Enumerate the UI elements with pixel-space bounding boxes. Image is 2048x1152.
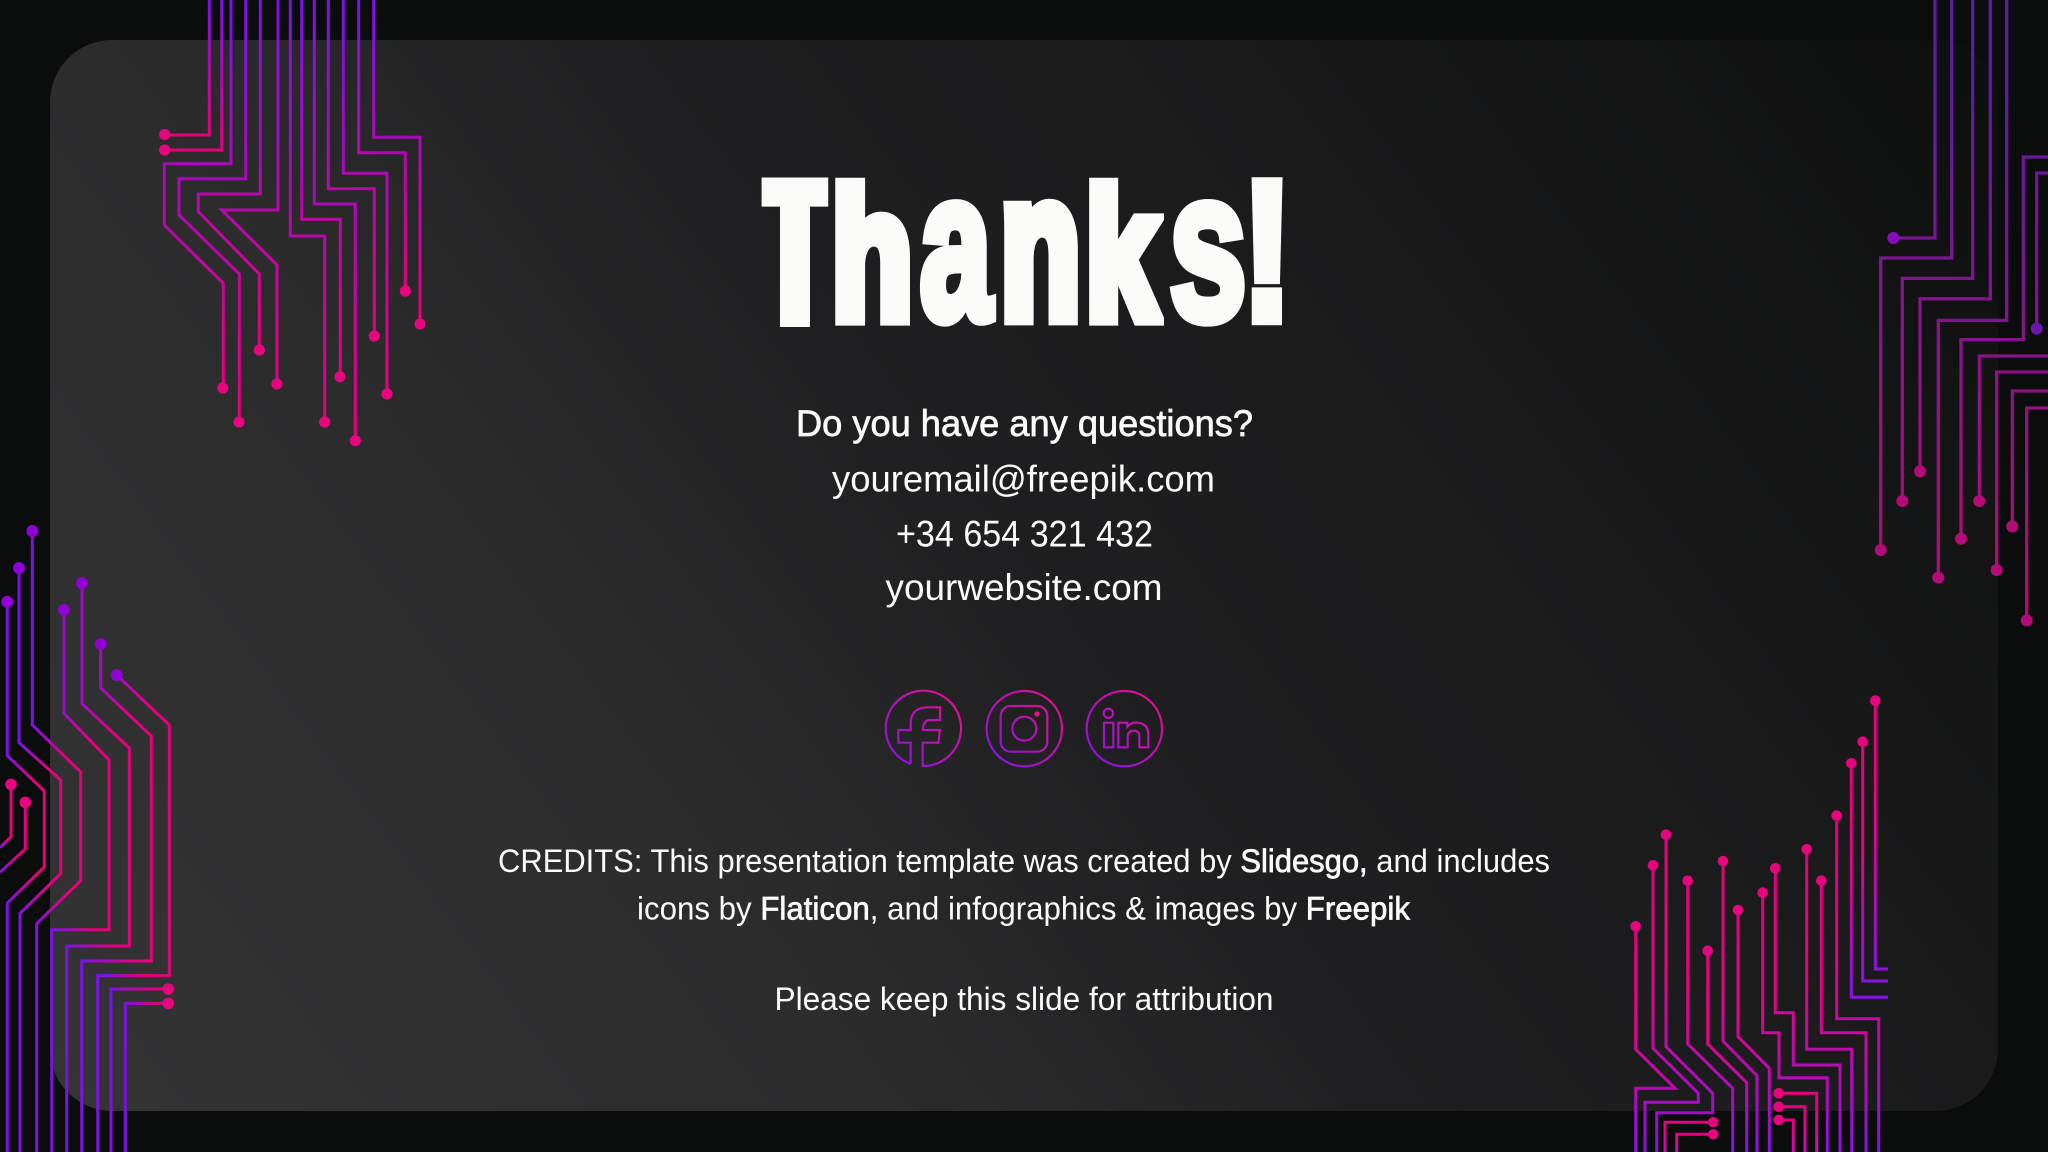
- question line: Do you have any questions?: [796, 403, 1253, 444]
- circuit: bottom left: [0, 525, 174, 1152]
- title: T: [762, 137, 828, 368]
- title: s: [1169, 127, 1247, 366]
- icon: linkedin: [1087, 691, 1162, 766]
- icon: instagram: [987, 691, 1062, 766]
- attribution note: Please keep this slide for attribution: [774, 981, 1274, 1017]
- phone: +34 654 321 432: [896, 514, 1153, 555]
- website: yourwebsite.com: [886, 567, 1162, 608]
- text block: contact details: [796, 403, 1253, 608]
- circuit: top left: [159, 0, 426, 446]
- email: youremail@freepik.com: [832, 459, 1215, 500]
- social icons: [886, 691, 1162, 767]
- icon: facebook: [886, 691, 961, 767]
- title: a: [920, 129, 991, 364]
- title: [762, 127, 1293, 368]
- circuit: top right: [1875, 0, 2048, 626]
- circuit: bottom right: [1630, 695, 1888, 1152]
- title: h: [832, 154, 912, 358]
- title: k: [1086, 154, 1157, 358]
- title: n: [1001, 135, 1080, 361]
- text block: credits: [498, 843, 1550, 1017]
- credits line 2: icons by Flaticon, and infographics & images by Freepik: [637, 890, 1411, 926]
- title: !: [1242, 142, 1293, 363]
- credits line 1: CREDITS: This presentation template was created by Slidesgo, and includes: [498, 843, 1550, 879]
